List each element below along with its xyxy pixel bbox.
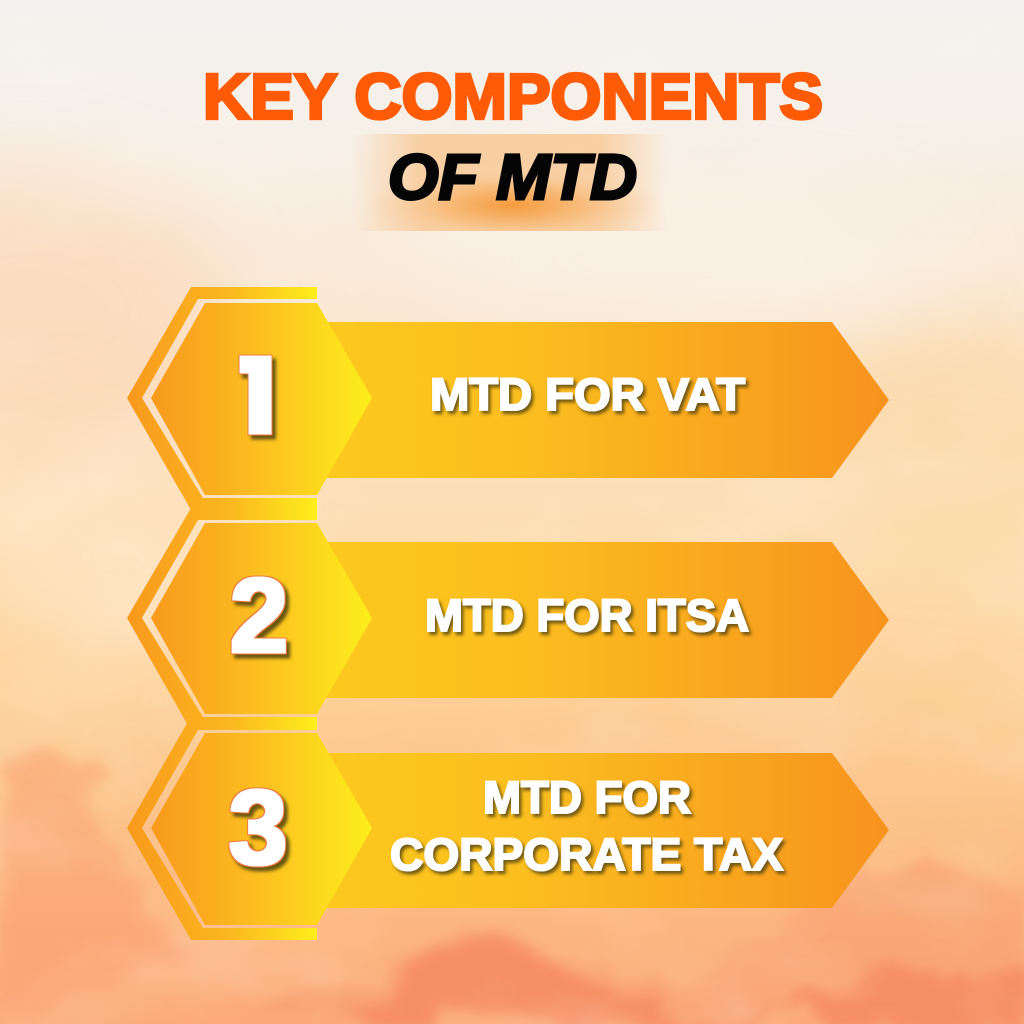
- number 1: [238, 354, 278, 442]
- item 1: MTD for VAT: [127, 287, 889, 510]
- hexagon 2: [151, 523, 372, 714]
- heading: key components: KEY COMPONENTS: [203, 60, 823, 132]
- label 3: CORPORATE TAX: [390, 829, 783, 880]
- item 2: MTD for ITSA: [127, 508, 889, 729]
- subtitle: of MTD: OF MTD: [388, 141, 637, 213]
- subtitle glow panel: [352, 134, 668, 231]
- label 1: MTD FOR VAT: [430, 369, 745, 420]
- arrow bar 2: [320, 542, 889, 698]
- item 3: MTD for corporate tax: [127, 718, 889, 940]
- title: [203, 60, 823, 231]
- hexagon 1: [151, 303, 372, 495]
- arrow bar 3: [320, 753, 889, 908]
- hexagon 3: [151, 733, 372, 925]
- label 2: MTD FOR ITSA: [425, 590, 749, 641]
- number 1: 1: [229, 338, 287, 456]
- hexagon frame 2: [127, 508, 317, 729]
- number 2: 2: [230, 557, 288, 675]
- arrow bar 1: [320, 322, 889, 478]
- hexagon frame 3: [127, 718, 317, 940]
- hexagon frame 1: [127, 287, 317, 510]
- label 3: [390, 772, 783, 880]
- number 3: 3: [229, 769, 287, 887]
- label 3: MTD FOR: [483, 772, 691, 823]
